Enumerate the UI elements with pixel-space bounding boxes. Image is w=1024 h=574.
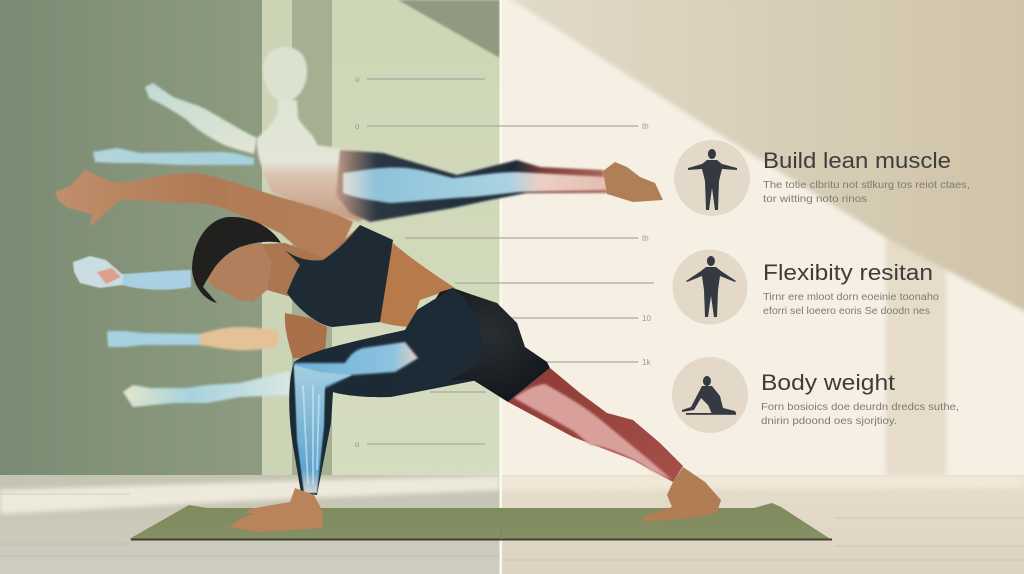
icon: standing figure in circle xyxy=(674,140,750,216)
ghost arm with hand muscle xyxy=(73,256,191,290)
benefit: flexibility: eforri sel loeero eoris Se doodn nes xyxy=(763,306,930,317)
blue thigh muscle overlay xyxy=(294,342,418,392)
annotation lines with labels: th xyxy=(642,122,649,131)
sports top xyxy=(285,225,393,327)
back muscles skin xyxy=(373,243,455,327)
annotation lines with labels: 10 xyxy=(642,314,651,323)
ghost arm orange forearm xyxy=(107,327,278,350)
red back calf with muscle overlay xyxy=(508,368,683,482)
annotation lines with labels: 1k xyxy=(642,358,651,367)
yoga mat xyxy=(130,503,832,540)
icon: kneeling figure on mat xyxy=(672,357,748,433)
benefit: build lean muscle xyxy=(674,140,970,216)
panel divider line xyxy=(500,0,502,574)
benefit: body weight xyxy=(672,357,959,433)
benefit: body weight: dnirin pdoond oes sjorjtioy. xyxy=(761,416,897,427)
description: Forn bosioics doe deurdn dredcs suthe, xyxy=(761,402,959,413)
annotation lines with labels: th xyxy=(642,234,649,243)
ghost arm lower xyxy=(123,371,290,407)
leggings: hips, front thigh, shin and back thigh xyxy=(289,288,550,495)
supporting arm xyxy=(285,313,327,358)
benefit: build lean muscle: tor witting noto rinos xyxy=(763,194,867,205)
mat right edge xyxy=(500,508,502,539)
panel: left green wall xyxy=(0,0,500,475)
blue shin muscle overlay xyxy=(294,365,352,493)
icon: standing figure arms lowered xyxy=(672,250,748,324)
heading: Body weight xyxy=(761,370,895,395)
figure: ghost torso and head xyxy=(257,47,385,222)
benefit: flexibility xyxy=(672,250,939,324)
raised leg with anatomical overlay xyxy=(336,150,663,222)
back foot xyxy=(641,467,721,522)
front foot and hand on mat xyxy=(230,488,323,532)
panel: wooden floor xyxy=(0,475,1024,574)
annotation lines with labels: o xyxy=(355,75,360,84)
annotation lines with labels: o xyxy=(355,440,360,449)
heading: Flexibity resitan xyxy=(763,260,933,285)
annotation lines with labels: o xyxy=(355,122,360,131)
ghost arm blue upper xyxy=(93,148,254,165)
main raised arm with hand xyxy=(55,170,353,262)
raised foot xyxy=(603,162,663,202)
ghost arm raised upper left xyxy=(145,83,257,154)
head with hair xyxy=(192,217,281,303)
description: The totie clbritu not stlkurg tos reiot ctaes, xyxy=(763,180,970,191)
annotation lines with labels xyxy=(355,75,654,449)
description: Tirnr ere mloot dorn eoeinie toonaho xyxy=(763,292,939,303)
panel: right cream wall with light and shadow xyxy=(500,0,1024,476)
heading: Build lean muscle xyxy=(763,148,951,173)
neck and shoulder xyxy=(240,225,360,296)
